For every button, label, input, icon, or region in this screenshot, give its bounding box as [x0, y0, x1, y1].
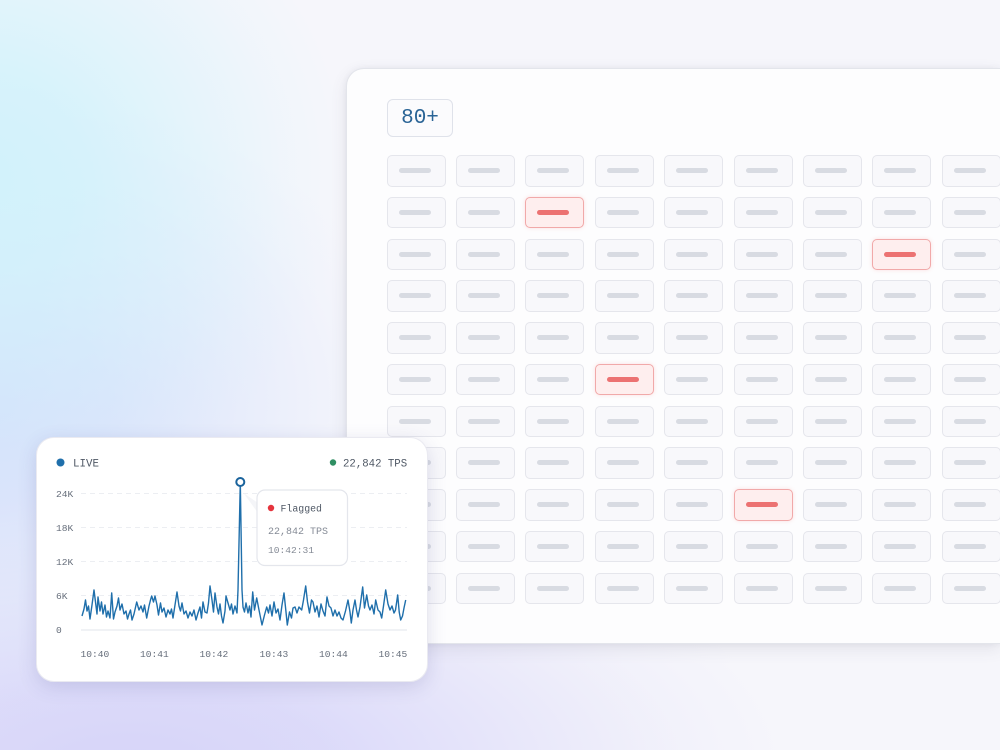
y-axis labels: 6K	[56, 591, 68, 602]
panel: live chart card	[36, 437, 428, 682]
tooltip: flagged transaction: 22,842 TPS	[268, 527, 328, 538]
x-axis labels: 10:41	[140, 649, 169, 660]
y-axis labels: 0	[56, 625, 62, 636]
y-axis labels: 18K	[56, 523, 74, 534]
legend: live status	[56, 458, 99, 470]
tooltip: flagged transaction: Flagged	[280, 504, 322, 514]
x-axis labels: 10:40	[80, 649, 110, 660]
badge: 80+ count: 80+	[401, 107, 439, 130]
tooltip: flagged transaction: 10:42:31	[268, 545, 314, 556]
TPS line series with spike	[82, 482, 406, 625]
x-axis labels: 10:44	[319, 649, 348, 660]
legend: current TPS: 22,842 TPS	[343, 458, 407, 470]
chart gridlines and baseline	[81, 494, 407, 630]
x-axis labels	[80, 649, 408, 660]
y-axis labels: 24K	[56, 489, 74, 500]
legend: live status: LIVE	[73, 458, 99, 470]
y-axis labels: 12K	[56, 557, 74, 568]
x-axis labels: 10:45	[378, 649, 408, 660]
x-axis labels: 10:42	[200, 649, 229, 660]
y-axis labels	[56, 489, 74, 636]
spike marker	[236, 478, 244, 486]
grid of status cells with four flagged in red	[387, 155, 1000, 604]
x-axis labels: 10:43	[260, 649, 289, 660]
tooltip: flagged transaction	[244, 490, 348, 566]
badge: 80+ count	[387, 99, 453, 137]
panel: transaction grid	[346, 68, 1000, 644]
